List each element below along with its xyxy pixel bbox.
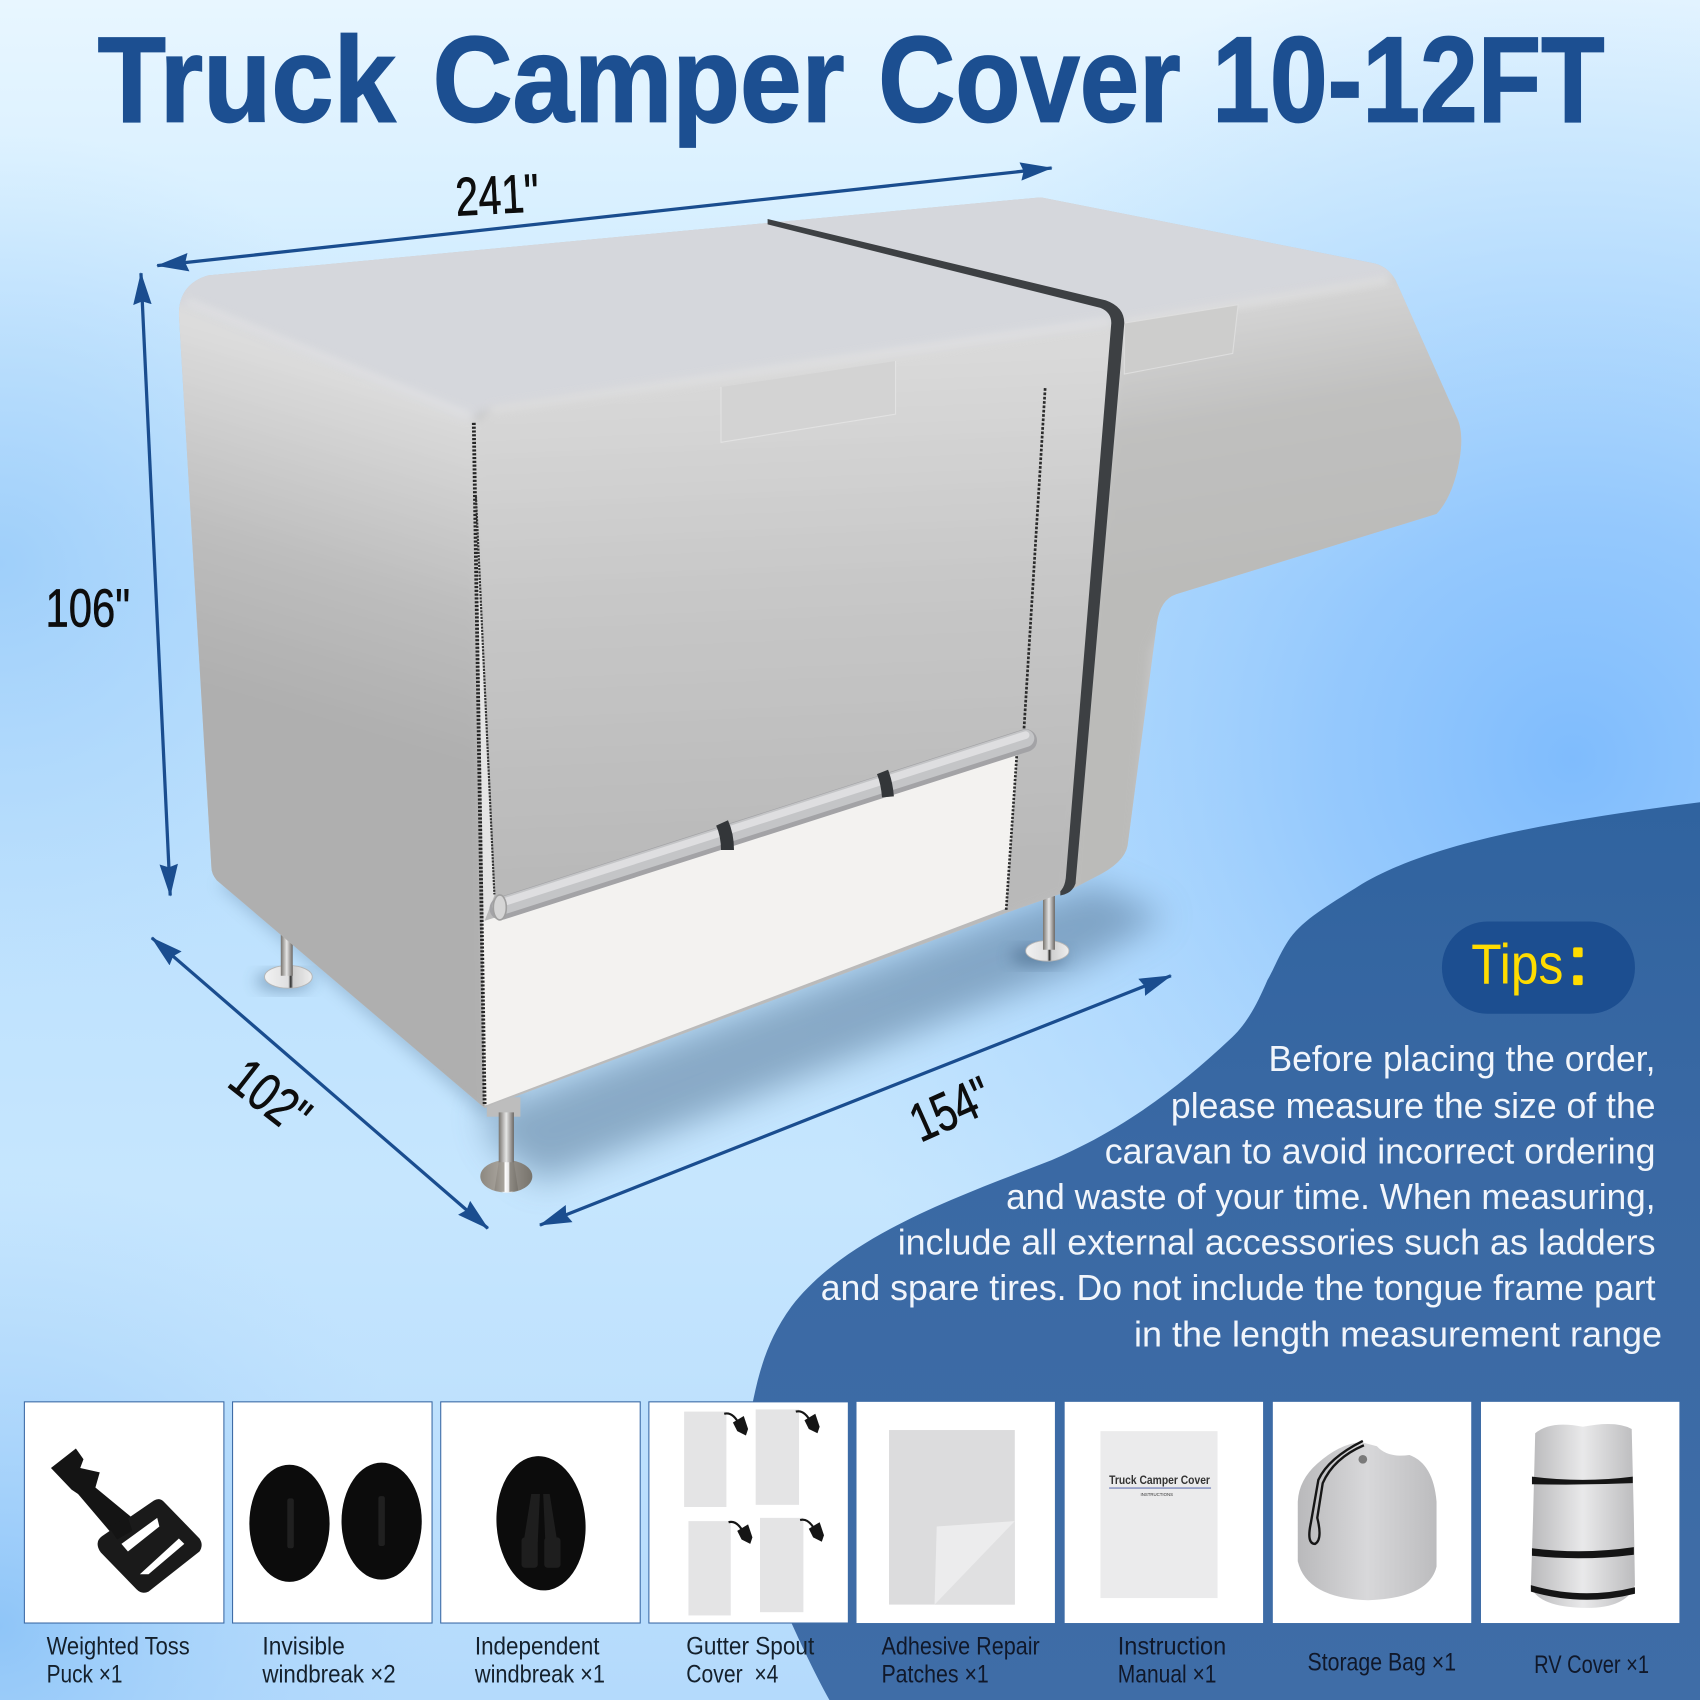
white lower panel xyxy=(482,752,1017,1106)
accessory: invisible windbreak xyxy=(233,1402,432,1689)
tips text: please measure the size of the xyxy=(1171,1086,1656,1126)
accessory: independent windbreak: Independent xyxy=(475,1632,600,1660)
dimension arrow: 241 inch xyxy=(157,163,1052,266)
title: Truck xyxy=(98,11,396,147)
front panel xyxy=(474,322,1119,1111)
tips text: caravan to avoid incorrect ordering xyxy=(1105,1131,1656,1171)
accessory: adhesive repair patches: Patches ×1 xyxy=(881,1661,989,1689)
accessory: gutter spout cover xyxy=(649,1402,848,1689)
tips text: include all external accessories such as ladders xyxy=(898,1222,1656,1262)
nose side face xyxy=(1068,276,1474,911)
title: 10-12FT xyxy=(1212,11,1605,147)
tips text: and waste of your time. When measuring, xyxy=(1006,1177,1656,1217)
camper feet xyxy=(265,889,1069,1193)
dimension arrow: 106 inch: 106" xyxy=(46,579,130,639)
dimension arrow: 102 inch: 102" xyxy=(218,1047,322,1147)
accessory: instruction manual: INSTRUCTIONS xyxy=(1141,1492,1173,1497)
title xyxy=(98,11,1605,147)
accessory: weighted toss puck xyxy=(24,1402,224,1689)
dimension arrow: 106 inch xyxy=(46,273,170,896)
dimension arrow: 154 inch: 154" xyxy=(901,1065,1001,1154)
accessory: storage bag: Storage Bag ×1 xyxy=(1308,1649,1456,1677)
ground shadows xyxy=(217,867,1165,1182)
storage flap side xyxy=(1124,305,1238,374)
tips badge xyxy=(1442,922,1635,1014)
accessory: adhesive repair patches: Adhesive Repair xyxy=(881,1632,1040,1660)
tips badge: : xyxy=(1569,924,1587,997)
roll bar xyxy=(493,735,1026,920)
tips text: in the length measurement range xyxy=(1134,1315,1662,1355)
accessory: adhesive repair patches xyxy=(857,1402,1055,1689)
camper body faces xyxy=(141,163,1474,1128)
accessory: independent windbreak xyxy=(441,1402,640,1689)
tips text xyxy=(821,1039,1662,1355)
accessory: rv cover xyxy=(1481,1402,1679,1679)
accessory: instruction manual: Manual ×1 xyxy=(1118,1661,1216,1689)
dimension arrow: 241 inch: 241" xyxy=(454,163,540,228)
accessory: independent windbreak: windbreak ×1 xyxy=(474,1661,605,1689)
left side face xyxy=(163,293,488,1117)
camper cover illustration xyxy=(141,163,1474,1193)
storage flap front xyxy=(721,361,896,442)
accessory: invisible windbreak: Invisible xyxy=(262,1632,345,1660)
dimension arrow: 102 inch xyxy=(152,938,488,1228)
accessory: weighted toss puck: Puck ×1 xyxy=(47,1661,123,1689)
title: Camper xyxy=(433,11,845,147)
accessory: gutter spout cover: Cover ×4 xyxy=(686,1661,779,1689)
accessory: instruction manual: Truck Camper Cover xyxy=(1109,1473,1210,1487)
ridge highlights xyxy=(186,280,1389,416)
accessory: storage bag xyxy=(1273,1402,1471,1677)
accessory: instruction manual xyxy=(1065,1402,1263,1689)
title: Cover xyxy=(878,11,1181,147)
tips text: Before placing the order, xyxy=(1268,1039,1656,1079)
accessory: invisible windbreak: windbreak ×2 xyxy=(261,1661,396,1689)
accessory: instruction manual: Instruction xyxy=(1118,1632,1226,1660)
tie strap xyxy=(768,219,1124,896)
accessory: gutter spout cover: Gutter Spout xyxy=(686,1632,814,1660)
accessory: weighted toss puck: Weighted Toss xyxy=(47,1632,190,1660)
door seams xyxy=(474,388,1045,1106)
blue wave panel xyxy=(752,802,1700,1700)
tips badge: Tips xyxy=(1471,932,1563,995)
seam strip xyxy=(477,510,494,924)
top face xyxy=(181,198,1393,418)
tips text: and spare tires. Do not include the tongue frame part xyxy=(821,1268,1656,1308)
accessory: rv cover: RV Cover ×1 xyxy=(1534,1651,1649,1679)
dimension arrow: 154 inch xyxy=(540,976,1171,1225)
